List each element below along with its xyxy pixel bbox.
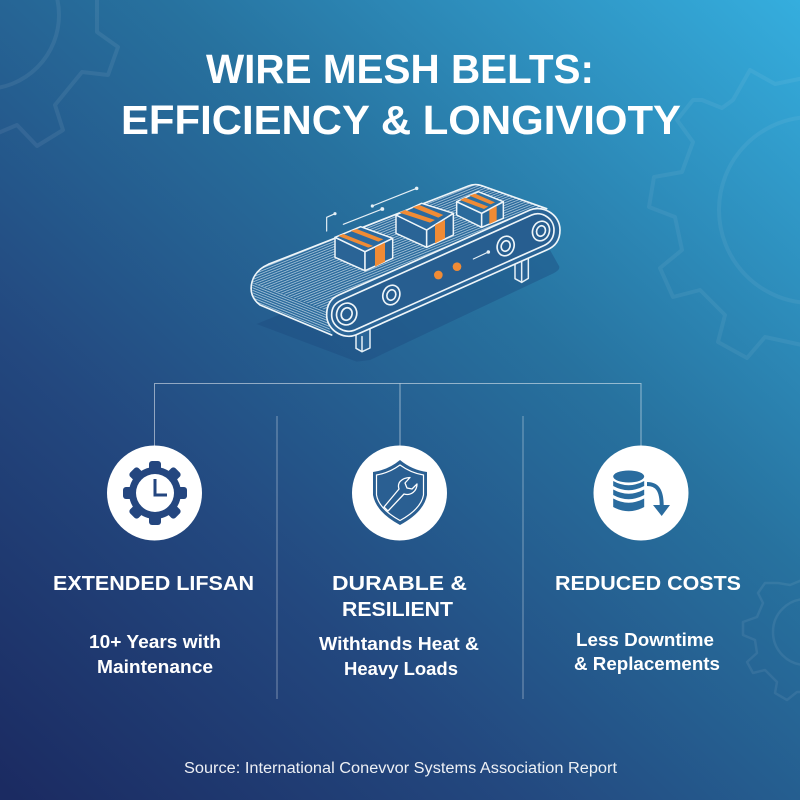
background gear: right: [649, 70, 800, 358]
box 3: [457, 192, 503, 227]
motion lines: [327, 187, 489, 259]
orange indicator dots: [434, 262, 461, 279]
right leg: [515, 253, 528, 282]
background gear: bottom right: [743, 580, 800, 700]
title: EFFICIENCY & LONGIVIOTY: [121, 97, 681, 143]
column 1 text: [53, 573, 254, 677]
title: WIRE MESH BELTS:: [206, 46, 594, 92]
column 2 text: Withtands Heat &: [319, 634, 479, 654]
column 1 text: EXTENDED LIFSAN: [53, 573, 254, 595]
title: [121, 46, 681, 143]
column 1 text: 10+ Years with: [89, 632, 221, 652]
belt side plate: [327, 209, 560, 336]
belt surface: [251, 185, 547, 335]
column 3 text: Less Downtime: [576, 630, 714, 650]
source: Source: International Conevvor Systems Association Report: [184, 760, 618, 777]
column 3 text: & Replacements: [574, 654, 720, 674]
icon: database with down arrow: [594, 446, 688, 540]
connector lines: [154, 384, 641, 446]
rollers: [334, 219, 552, 328]
box 1: [335, 227, 393, 271]
illustration: conveyor belt: [251, 185, 560, 362]
column dividers: [277, 416, 523, 699]
background gear: top left: [0, 0, 118, 146]
column 3 text: REDUCED COSTS: [555, 573, 741, 595]
column 2 text: RESILIENT: [342, 599, 453, 621]
icon: gear with clock: [107, 446, 202, 540]
column 2 text: [319, 573, 479, 679]
column 3 text: [555, 573, 741, 674]
left leg: [356, 327, 370, 352]
icon: shield with wrench: [352, 446, 447, 540]
conveyor shadow: [257, 250, 559, 362]
column 2 text: Heavy Loads: [344, 659, 458, 679]
column 1 text: Maintenance: [97, 657, 213, 677]
box 2: [396, 203, 453, 247]
column 2 text: DURABLE &: [332, 573, 467, 595]
